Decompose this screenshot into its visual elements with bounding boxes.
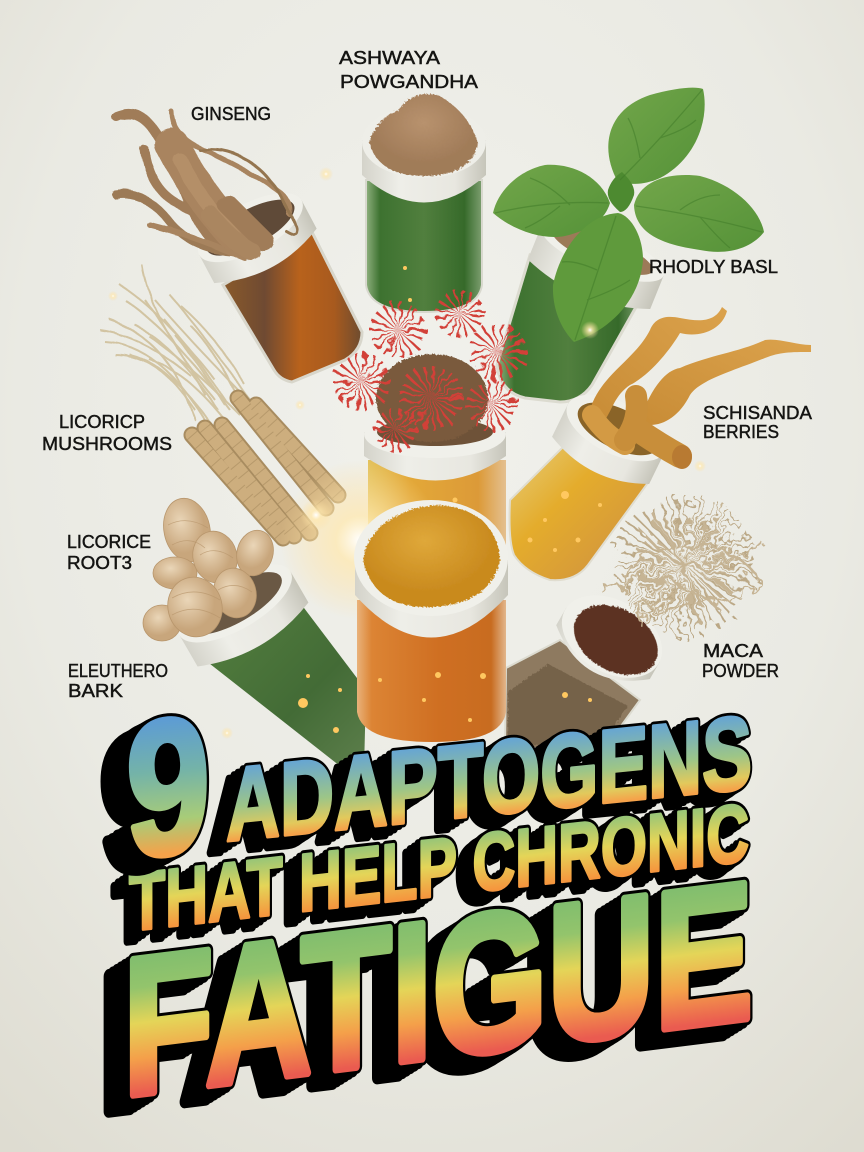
label: schisanda berries: SCHISANDA [703,403,812,423]
label: ashwaya powgandha: ASHWAYA [339,48,440,68]
jar: ashwagandha [362,94,486,312]
title: numeral 9: 9 [121,678,205,900]
jar: schisandra [510,381,676,580]
powder: turmeric [363,505,500,607]
powder: ashwagandha [369,94,478,176]
jar: licorice [167,549,366,770]
title [99,676,753,1152]
label: schisanda berries [703,403,812,442]
roots: bundled sticks [100,265,338,538]
label: ginseng: GINSENG [191,104,271,124]
title: numeral 9: 9 [110,684,194,906]
center glow [280,460,440,620]
label: schisanda berries: BERRIES [703,422,779,442]
label: licorice root: ROOT3 [67,553,132,573]
label: ashwaya powgandha: POWGANDHA [340,72,478,92]
roots: tangled maca [600,510,760,630]
roots: golden [590,307,811,469]
label: eleuthero bark: BARK [68,681,123,701]
jar: center yellow [364,410,506,560]
sparkles [108,167,706,739]
title: numeral 9: 9 [126,676,210,898]
label: licoricp mushrooms: MUSHROOMS [42,434,172,454]
label: licorice root [67,532,151,573]
jar: rhodiola [497,208,671,402]
title: numeral 9: 9 [115,682,199,904]
ginseng root [116,112,296,258]
label: licoricp mushrooms: LICORICP [59,412,145,432]
ginger pieces [143,494,278,643]
title: numeral 9: 9 [126,676,210,898]
title: numeral 9: 9 [105,688,189,910]
jar: front turmeric [354,500,508,742]
label: maca powder: POWDER [702,661,779,681]
label: eleuthero bark: ELEUTHERO [68,661,168,681]
label: ashwaya powgandha [339,48,478,92]
label: maca powder [702,641,779,681]
leaves: basil [493,88,764,342]
powder: maca [561,591,670,689]
label: licoricp mushrooms [42,412,172,454]
label: licorice root: LICORICE [67,532,151,552]
jar: ginseng [188,179,362,382]
flower: red [348,302,512,442]
label: eleuthero bark [68,661,168,701]
jar: maca [505,578,677,748]
label: rhodly basl: RHODLY BASL [649,257,778,277]
label: maca powder: MACA [703,641,763,661]
title: numeral 9: 9 [100,690,184,912]
